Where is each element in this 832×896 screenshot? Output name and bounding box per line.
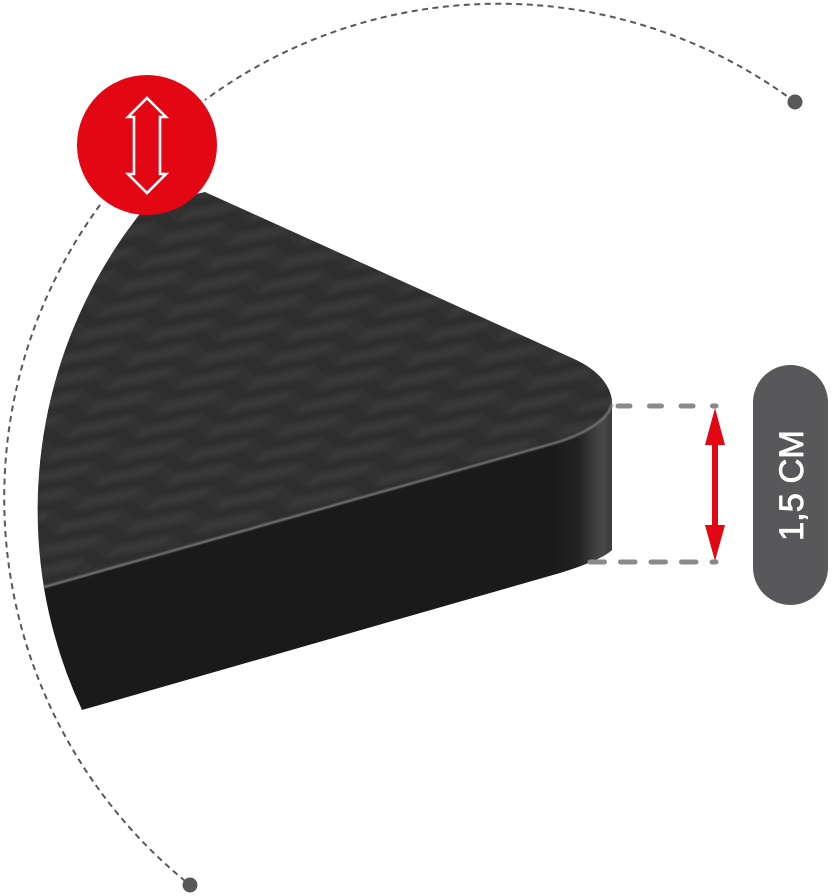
- dimension guide: top dashed line: [618, 404, 716, 408]
- icon: red circle with double arrow: [77, 75, 217, 215]
- dimension guide: bottom dashed line: [590, 560, 716, 564]
- arc end dot: bottom: [182, 878, 198, 892]
- dashed arc: top: [205, 4, 795, 102]
- panel corner: carbon desk top: [20, 170, 630, 710]
- dashed arc: left: [4, 205, 190, 885]
- label pill: 1,5 CM: 1,5 CM: [773, 430, 811, 541]
- arc end dot: top right: [788, 94, 802, 110]
- red double-headed dimension arrow: [705, 408, 725, 561]
- label pill: 1,5 CM: [753, 365, 828, 605]
- side face: [44, 400, 612, 710]
- top face with carbon weave: [38, 192, 612, 588]
- front edge highlight: [44, 404, 612, 587]
